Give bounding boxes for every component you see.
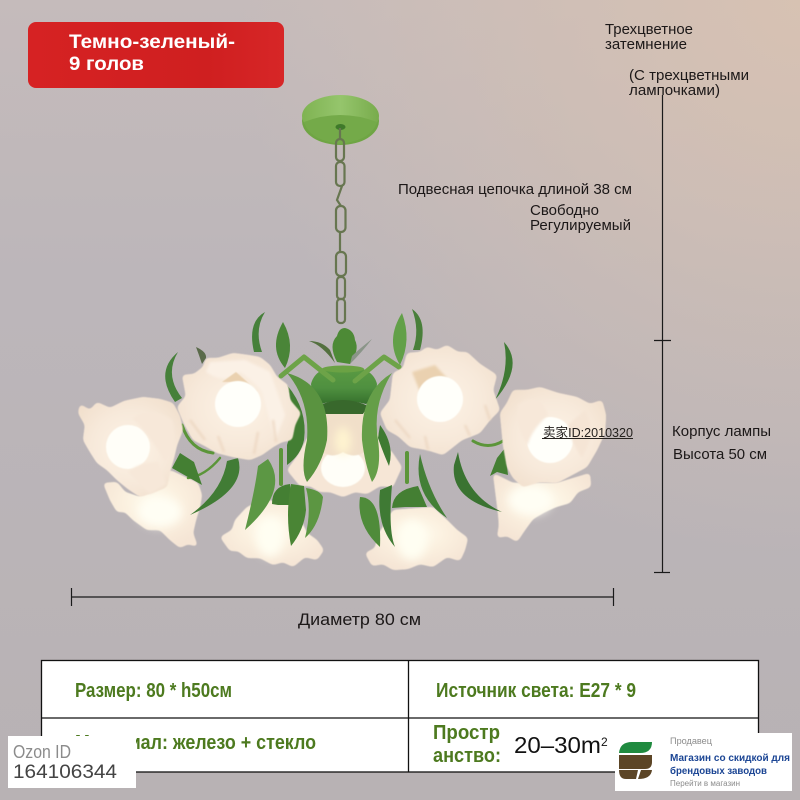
text: dimming note: затемнение [605,37,687,53]
text: diameter: Диаметр 80 см [298,611,421,629]
back flower: lower centre left [220,500,324,567]
chandelier [78,95,606,570]
stems under lamps [182,425,503,484]
spec: light source: Источник света: E27 * 9 [436,680,636,702]
large leaves around the centre [287,373,392,482]
leaves: lower left group [190,458,323,546]
diameter dimension line [71,588,614,606]
text: dimming note: (С трехцветными [629,68,749,84]
spec: size: Размер: 80 * h50см [75,680,232,702]
front flower: far right with bulb [500,387,606,487]
seller card [615,733,792,791]
seller card: Продавец [670,736,712,746]
spec: space: 2 [601,735,608,749]
central flower with bulb [287,406,402,497]
badge: colour and head count: Темно-зеленый- [69,31,235,53]
front flower: far left with bulb [78,397,183,497]
specification table [41,660,758,772]
text: chain length note: Регулируемый [530,218,631,234]
height dimension line [654,95,671,572]
seller card: Перейти в магазин [670,779,740,788]
front flower: upper left with bulb [177,353,301,460]
text: body height: Корпус лампы [672,424,771,440]
calyxes [172,404,508,508]
seller card: Магазин со скидкой для [670,753,790,764]
text: chain length note: Подвесная цепочка длиной 38 см [398,182,632,198]
spec: space [433,722,608,767]
text: body height: Высота 50 см [673,447,767,463]
badge: colour and head count [28,22,284,88]
badge: colour and head count: 9 голов [69,53,144,75]
leaves: lower right group [359,452,502,547]
hub with decorative crown [281,328,399,414]
watermark: seller id: 卖家ID:2010320 [543,425,633,440]
spec: space: 20–30m [514,732,601,758]
text: dimming note: лампочками) [629,83,720,99]
ozon id box: 164106344 [13,762,117,783]
text: chain length note [398,182,632,234]
ozon id box [8,736,136,788]
text: body height [672,424,771,463]
back flower: lower centre right [365,507,468,570]
chain [336,128,346,323]
spec: space: анство: [433,745,501,767]
icon: seller logo [619,742,652,779]
text: chain length note: Свободно [530,203,599,219]
ozon id box: Ozon ID [13,742,71,762]
leaves above lamps [165,309,513,402]
ceiling plate [302,95,379,145]
text: dimming note: Трехцветное [605,22,693,38]
spec: material: Материал: железо + стекло [75,732,316,754]
front flower: upper right with bulb [380,345,500,455]
back flower: lower left [103,470,202,548]
back flower: lower right [493,473,591,542]
spec: space: Простр [433,722,500,744]
text: dimming note [605,22,749,99]
seller card: брендовых заводов [670,765,767,777]
